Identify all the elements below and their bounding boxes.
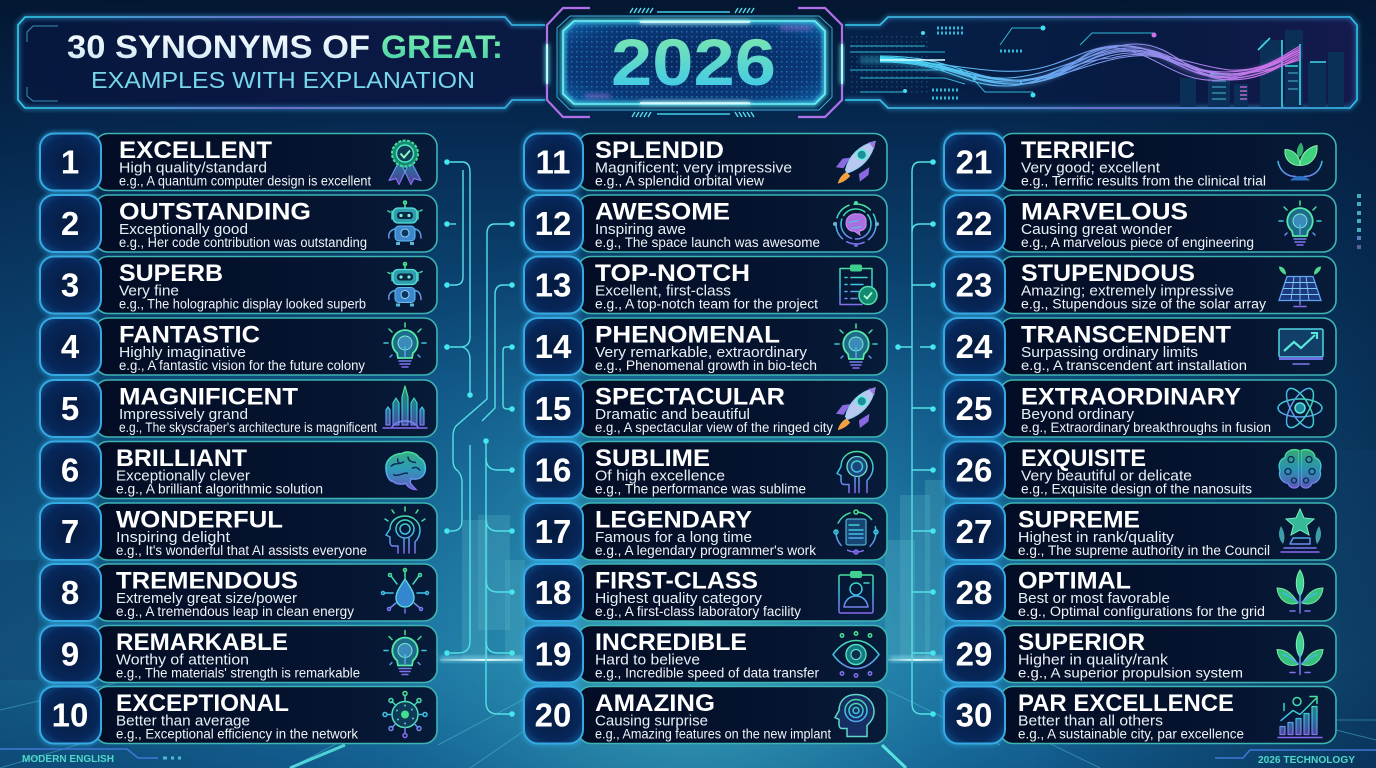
row 16: Of high excellence [595,468,725,484]
light wave [860,44,1300,86]
row 15: SPECTACULAR [595,384,785,410]
row 14: PHENOMENAL [595,322,780,348]
row 7: Inspiring delight [116,530,230,546]
row 20: Causing surprise [595,714,708,730]
row 15: Dramatic and beautiful [595,407,750,423]
row 15: e.g., A spectacular view of the ringed city [595,420,833,435]
footer right label [1215,750,1376,766]
row 8: TREMENDOUS [116,568,298,594]
row 9: e.g., The materials' strength is remarkable [116,666,360,680]
row 10: 10 [52,696,88,734]
row 21 [944,134,1336,190]
row 19 [524,626,887,682]
row 26: EXQUISITE [1021,445,1146,472]
row 13: TOP-NOTCH [595,260,750,287]
tech banner [845,17,1357,108]
row 9: Worthy of attention [116,652,249,668]
row 11: SPLENDID [595,137,724,164]
row 13: e.g., A top-notch team for the project [595,296,818,312]
row 21: TERRIFIC [1021,137,1135,164]
row 21: 21 [956,144,992,180]
row 7 [40,503,437,560]
row 15 [524,380,887,437]
row 18: 18 [535,574,571,611]
row 6: BRILLIANT [116,445,247,472]
row 24: e.g., A transcendent art installation [1021,358,1247,373]
row 4 [40,318,437,375]
row 8: Extremely great size/power [116,591,297,607]
year panel [547,8,842,117]
row 12 [524,195,887,252]
row 28: Best or most favorable [1018,591,1170,607]
year text: 2026 [611,25,776,99]
row 7: e.g., It's wonderful that AI assists everyone [116,543,367,558]
row 16: SUBLIME [595,445,710,472]
row 22: MARVELOUS [1021,198,1188,226]
row 16: e.g., The performance was sublime [595,482,806,496]
row 5: Impressively grand [119,407,248,423]
row 6: e.g., A brilliant algorithmic solution [116,482,323,496]
title panel [18,17,545,108]
row 26 [944,442,1336,498]
row 28: e.g., Optimal configurations for the grid [1018,604,1265,619]
row 10: EXCEPTIONAL [116,690,289,717]
row 17: 17 [535,513,571,550]
row 19: Hard to believe [595,652,700,668]
row 13: 13 [535,266,571,304]
footer left label: MODERN ENGLISH [22,753,114,765]
row 13: Excellent, first-class [595,284,731,300]
row 21: e.g., Terrific results from the clinical trial [1021,174,1266,188]
row 9: REMARKABLE [116,629,288,656]
row 25: 25 [956,390,992,427]
row 23: 23 [956,266,992,304]
column 3 [944,134,1336,744]
row 12: e.g., The space launch was awesome [595,235,820,250]
row 10: e.g., Exceptional efficiency in the network [116,726,358,742]
circuit lines [850,28,1155,98]
row 19: e.g., Incredible speed of data transfer [595,666,820,680]
row 22 [944,195,1336,252]
row 1: High quality/standard [119,160,267,176]
row 6: 6 [61,452,79,488]
row 10: Better than average [116,714,250,730]
row 9 [40,626,437,682]
subtitle: EXAMPLES WITH EXPLANATION [91,67,475,93]
row 30: Better than all others [1018,714,1163,730]
row 25: e.g., Extraordinary breakthroughs in fusion [1021,420,1271,435]
row 9: 9 [61,636,79,672]
row 6: Exceptionally clever [116,468,250,484]
row 3: e.g., The holographic display looked superb [119,296,366,312]
row 1 [40,134,437,190]
row 10 [40,686,437,744]
row 2 [40,195,437,252]
row 17: Famous for a long time [595,530,752,546]
column 1 [40,134,437,744]
row 2: Exceptionally good [119,222,248,238]
row 28: OPTIMAL [1018,568,1131,594]
row 26: Very beautiful or delicate [1021,468,1192,484]
row 5 [40,380,437,437]
row 20: 20 [535,696,571,734]
row 4: 4 [61,328,80,365]
row 24: TRANSCENDENT [1021,322,1231,348]
row 16: 16 [535,452,571,488]
row 1: 1 [61,144,79,180]
row 22: e.g., A marvelous piece of engineering [1021,235,1254,250]
row 14: 14 [535,328,572,365]
row 8: e.g., A tremendous leap in clean energy [116,604,354,619]
row 11: Magnificent; very impressive [595,160,792,176]
row 29: Higher in quality/rank [1018,652,1169,668]
row 27: SUPREME [1018,506,1140,534]
row 3: SUPERB [119,260,223,287]
title text: 30 SYNONYMS OF [67,29,370,65]
row 18 [524,564,887,621]
row 2: OUTSTANDING [119,198,311,226]
footer left label [0,749,181,765]
row 12: AWESOME [595,198,730,226]
row 29 [944,626,1336,682]
row 17: e.g., A legendary programmer's work [595,543,816,558]
row 26: 26 [956,452,992,488]
row 25 [944,380,1336,437]
row 18: FIRST-CLASS [595,568,758,594]
row 6 [40,442,437,498]
column 2 [524,134,887,744]
row 5: MAGNIFICENT [119,384,298,410]
row 24: Surpassing ordinary limits [1021,345,1198,361]
row 14: Very remarkable, extraordinary [595,345,808,361]
row 17: LEGENDARY [595,506,752,534]
row 23 [944,256,1336,314]
row 30: 30 [956,696,992,734]
row 14 [524,318,887,375]
row 11: e.g., A splendid orbital view [595,174,764,188]
row 28 [944,564,1336,621]
row 13 [524,256,887,314]
row 4: FANTASTIC [119,322,260,348]
row 29: SUPERIOR [1018,629,1145,656]
row 27: 27 [956,513,992,550]
row 7: WONDERFUL [116,506,283,534]
row 27 [944,503,1336,560]
row 27: e.g., The supreme authority in the Council [1018,543,1270,558]
row 3: Very fine [119,284,179,300]
row 27: Highest in rank/quality [1018,530,1175,546]
row 15: 15 [535,390,571,427]
row 11 [524,134,887,190]
row 3 [40,256,437,314]
footer right label: 2026 TECHNOLOGY [1258,754,1355,766]
title highlight word: GREAT: [381,29,503,65]
row 12: 12 [535,205,571,242]
row 11: 11 [536,144,570,180]
row 30: e.g., A sustainable city, par excellence [1018,726,1244,742]
row 26: e.g., Exquisite design of the nanosuits [1021,482,1252,496]
row 25: Beyond ordinary [1021,407,1135,423]
row 20: AMAZING [595,690,715,717]
row 25: EXTRAORDINARY [1021,384,1241,410]
row 23: STUPENDOUS [1021,260,1195,287]
row 23: Amazing; extremely impressive [1021,284,1234,300]
row 8: 8 [61,574,79,611]
row 20 [524,686,887,744]
row 7: 7 [61,513,79,550]
row 30: PAR EXCELLENCE [1018,690,1234,717]
row 28: 28 [956,574,992,611]
connector nodes [444,159,936,717]
row 20: e.g., Amazing features on the new implant [595,726,831,742]
row 4: Highly imaginative [119,345,246,361]
row 24: 24 [956,328,993,365]
row 22: 22 [956,205,992,242]
row 21: Very good; excellent [1021,160,1160,176]
row 16 [524,442,887,498]
row 12: Inspiring awe [595,222,686,238]
row 1: EXCELLENT [119,137,272,164]
row 24 [944,318,1336,375]
connector lines [444,159,936,717]
row 3: 3 [61,266,79,304]
row 2: e.g., Her code contribution was outstanding [119,235,367,250]
row 14: e.g., Phenomenal growth in bio-tech [595,358,817,373]
row 17 [524,503,887,560]
row 1: e.g., A quantum computer design is excellent [119,174,371,188]
row 23: e.g., Stupendous size of the solar array [1021,296,1266,312]
row 5: 5 [61,390,79,427]
row 18: Highest quality category [595,591,763,607]
row 29: e.g., A superior propulsion system [1018,666,1243,680]
row 19: 19 [535,636,571,672]
row 19: INCREDIBLE [595,629,747,656]
row 8 [40,564,437,621]
row 5: e.g., The skyscraper's architecture is magnificent [119,420,377,435]
row 29: 29 [956,636,992,672]
row 22: Causing great wonder [1021,222,1172,238]
row 2: 2 [61,205,79,242]
row 30 [944,686,1336,744]
row 18: e.g., A first-class laboratory facility [595,604,801,619]
skyline [1180,30,1344,107]
row 4: e.g., A fantastic vision for the future colony [119,358,365,373]
